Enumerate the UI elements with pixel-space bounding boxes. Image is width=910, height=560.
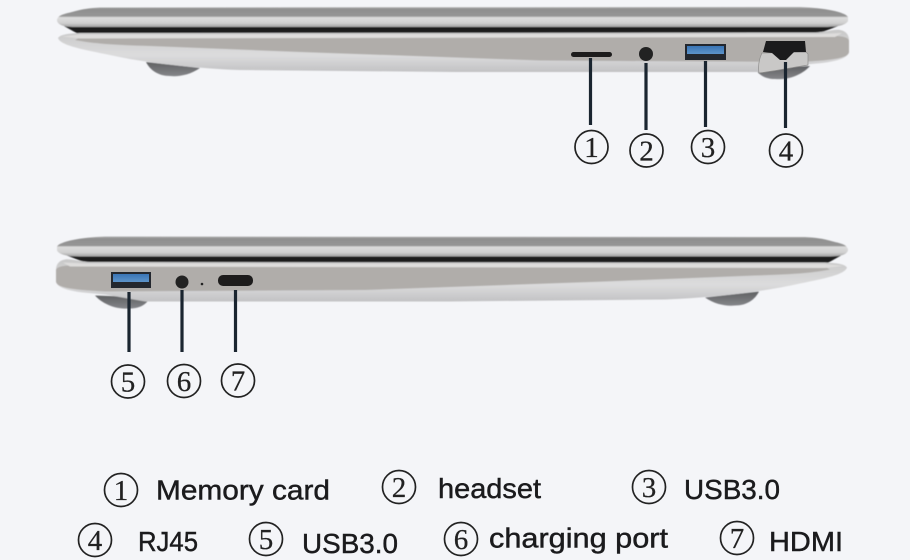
- legend item 4: RJ45: 4: [88, 525, 103, 557]
- legend item 7: HDMI: HDMI: [769, 526, 843, 557]
- port: charging jack: [176, 276, 188, 288]
- marker 7: 7: [231, 366, 245, 398]
- marker 7: [222, 364, 254, 398]
- laptop side view: USB, charging and HDMI side: [56, 236, 848, 309]
- marker 2: [630, 134, 663, 168]
- leader lines: bottom ports: [129, 290, 236, 352]
- marker 1: [575, 130, 608, 164]
- legend item 2: headset: headset: [438, 473, 541, 504]
- marker 4: 4: [779, 136, 794, 168]
- marker 5: 5: [121, 366, 135, 398]
- marker 1: 1: [584, 132, 599, 164]
- port: headset jack: [639, 47, 653, 61]
- legend item 2: headset: [382, 470, 541, 504]
- marker 3: 3: [701, 132, 715, 164]
- legend item 6: charging port: [444, 522, 668, 556]
- port: USB3.0 blue: [685, 44, 726, 60]
- legend item 6: charging port: charging port: [489, 522, 668, 554]
- legend: port key: [78, 470, 843, 559]
- indicator light: [201, 283, 203, 285]
- port: memory card slot: [571, 52, 612, 57]
- legend item 5: USB3.0: USB3.0: [302, 528, 398, 559]
- legend item 4: RJ45: RJ45: [138, 526, 198, 557]
- legend item 7: HDMI: [720, 522, 843, 557]
- legend item 5: USB3.0: 5: [259, 524, 273, 556]
- laptop side view: memory card, headset, USB and RJ45 side: [57, 7, 849, 79]
- port: RJ45 ethernet: [759, 41, 808, 73]
- marker 5: [112, 365, 144, 398]
- legend item 3: USB3.0: [632, 470, 780, 505]
- marker 6: [168, 364, 200, 398]
- marker 4: [770, 134, 802, 168]
- legend item 4: RJ45: [78, 524, 198, 557]
- legend item 1: memory card: 1: [114, 475, 128, 507]
- port: HDMI: [218, 275, 253, 286]
- legend item 3: USB3.0: USB3.0: [684, 474, 780, 505]
- marker 2: 2: [639, 136, 654, 168]
- port: USB3.0 blue: [111, 272, 151, 288]
- leader lines: top ports: [590, 58, 786, 130]
- legend item 2: headset: 2: [392, 472, 406, 504]
- legend item 1: memory card: [104, 474, 330, 507]
- legend item 1: memory card: Memory card: [156, 474, 330, 506]
- legend item 6: charging port: 6: [454, 524, 468, 556]
- legend item 5: USB3.0: [250, 522, 398, 559]
- legend item 3: USB3.0: 3: [642, 472, 656, 504]
- legend item 7: HDMI: 7: [730, 523, 744, 555]
- marker 3: [692, 130, 724, 164]
- marker 6: 6: [177, 366, 191, 398]
